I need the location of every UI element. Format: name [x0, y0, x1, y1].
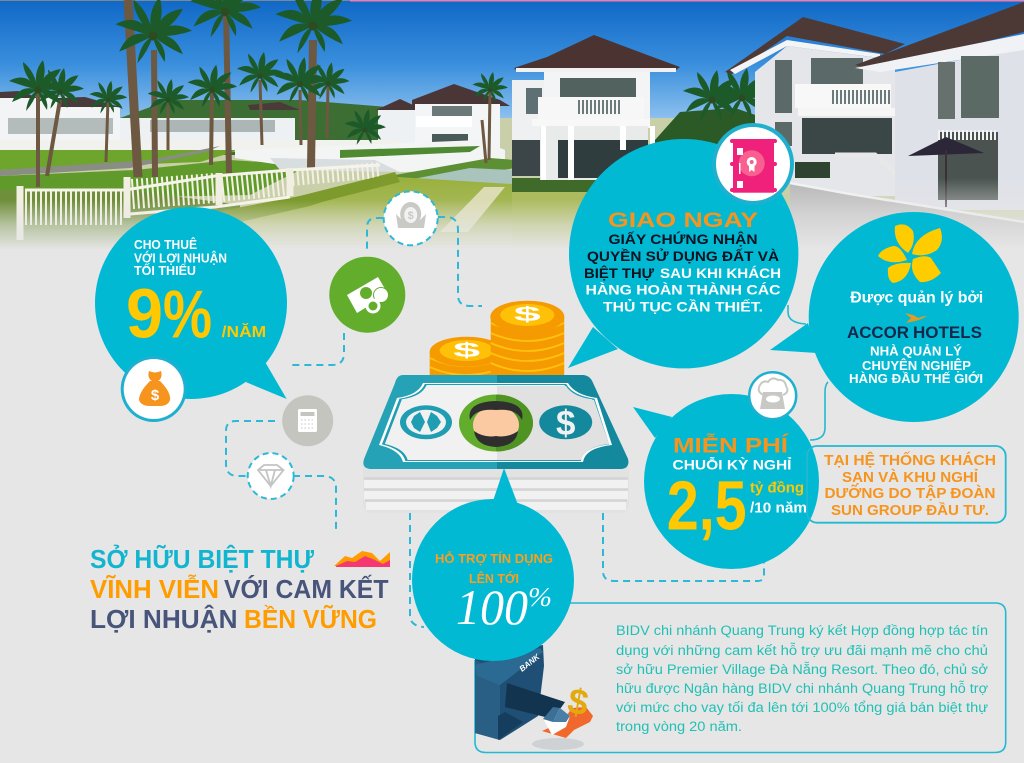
- callout: Sun Group hotels: SẠN VÀ KHU NGHỈ: [842, 469, 978, 486]
- icon: certificate notebook: [712, 123, 794, 205]
- bubble: free holiday chain: tỷ đồng: [750, 480, 804, 497]
- bubble: Accor Hotels management: HOTELS: [913, 323, 982, 342]
- bubble: rental yield 9%: 9: [126, 275, 163, 353]
- bubble: Accor Hotels management: HÀNG ĐẦU THẾ GIỚI: [849, 371, 983, 386]
- bubble: immediate handover: THỦ TỤC CẦN THIẾT.: [603, 298, 763, 315]
- callout: Sun Group hotels: SUN GROUP ĐẦU TƯ.: [831, 502, 989, 519]
- icon: diamond: [248, 453, 294, 499]
- title: VỚI CAM KẾT: [224, 574, 389, 604]
- text panel: BIDV credit: sở hữu Premier Village Đà Nẵng Resort. Theo đó, chủ sở: [616, 662, 988, 677]
- icon: savings badge: $: [408, 210, 414, 222]
- bubble: free holiday chain: /10 năm: [750, 500, 807, 517]
- title: VĨNH VIỄN: [90, 574, 219, 604]
- bubble: Accor Hotels management: CHUYÊN NGHIỆP: [862, 358, 971, 373]
- bubble: immediate handover: HÀNG HOÀN THÀNH CÁC: [586, 282, 780, 298]
- title: LỢI NHUẬN: [90, 604, 238, 634]
- icon: green money: [329, 257, 405, 333]
- bubble: immediate handover: BIỆT THỰ: [584, 264, 654, 281]
- icon: bank building: BANK: [518, 652, 542, 674]
- bubble: rental yield 9%: TỐI THIỂU: [134, 263, 196, 278]
- bubble: rental yield 9%: [95, 207, 287, 399]
- callout: Sun Group hotels: DƯỠNG DO TẬP ĐOÀN: [824, 484, 996, 502]
- bubble: credit support 100%: LÊN TỚI: [469, 571, 519, 586]
- text panel: BIDV credit: dụng với những cam kết hỗ trợ ưu đãi mạnh mẽ cho chủ: [616, 643, 988, 658]
- callout: Sun Group hotels: TẠI HỆ THỐNG KHÁCH: [824, 451, 996, 469]
- icon: calculator: [282, 395, 333, 446]
- bubble: free holiday chain: MIỄN PHÍ: [673, 435, 789, 458]
- coin stacks: $: [453, 340, 480, 362]
- text panel: BIDV credit: BIDV chi nhánh Quang Trung ký kết Hợp đồng hợp tác tín: [616, 623, 988, 638]
- white fence: [20, 165, 395, 240]
- bubble: immediate handover: GIẤY CHỨNG NHẬN: [608, 230, 758, 247]
- icon: accor bird: [905, 313, 927, 323]
- bubble: immediate handover: GIAO NGAY: [608, 209, 758, 232]
- bubble: Accor Hotels management: Được quản lý bởi: [850, 290, 983, 307]
- title: [90, 543, 389, 634]
- bubble: free holiday chain: 2,5: [667, 466, 747, 544]
- bubble: free holiday chain: [633, 394, 819, 569]
- bubble: credit support 100%: 100: [456, 579, 528, 635]
- bubble: credit support 100%: HỖ TRỢ TÍN DỤNG: [435, 551, 553, 566]
- bubble: rental yield 9%: /NĂM: [222, 322, 266, 341]
- icon: cloud phone: [749, 372, 796, 419]
- icon: bank building: [475, 645, 593, 750]
- icon: money bag: $: [151, 387, 160, 404]
- bubble: immediate handover: SAU KHI KHÁCH: [660, 265, 781, 281]
- icon: man portrait: [459, 394, 533, 452]
- bubble: free holiday chain: CHUỖI KỲ NGHỈ: [672, 455, 792, 472]
- villa right 2: [790, 2, 1024, 250]
- bubble: rental yield 9%: %: [163, 277, 212, 353]
- title: SỞ HỮU BIỆT THỰ: [90, 543, 314, 574]
- palm trees: [9, 0, 772, 187]
- coin stacks: $: [514, 304, 541, 326]
- bubble: immediate handover: QUYỀN SỬ DỤNG ĐẤT VÀ: [587, 247, 779, 264]
- bubble: immediate handover: [568, 139, 798, 368]
- villa right 1: [725, 17, 915, 196]
- icon: bank building: $: [565, 680, 592, 724]
- icon: yellow flower: [878, 224, 942, 283]
- villa centre: [512, 35, 680, 180]
- text panel: BIDV credit: hữu được Ngân hàng BIDV chi nhánh Quang Trung hỗ trợ: [616, 681, 988, 696]
- bubble: rental yield 9%: CHO THUÊ: [134, 237, 197, 252]
- title: BỀN VỮNG: [244, 604, 377, 634]
- callout: Sun Group hotels: [807, 446, 1006, 523]
- text panel: BIDV credit: [475, 603, 1006, 752]
- bubble: Accor Hotels management: ACCOR: [847, 323, 909, 342]
- solid connector lines: [788, 305, 828, 440]
- bubble: Accor Hotels management: [770, 212, 1019, 422]
- photo fade left: [0, 200, 790, 250]
- header resort photo: [0, 0, 1024, 250]
- text panel: BIDV credit: trong vòng 20 năm.: [616, 719, 742, 734]
- banknote stack: $: [556, 404, 575, 443]
- bubble: rental yield 9%: VỚI LỢI NHUẬN: [134, 250, 227, 265]
- dashed connector lines: [226, 217, 764, 627]
- icon: mini area chart: [334, 551, 390, 567]
- coin stacks: [430, 301, 564, 378]
- icon: money bag: [121, 356, 187, 422]
- banknote stack: [363, 375, 629, 513]
- bubble: credit support 100%: [412, 468, 574, 661]
- photo fade right: [790, 178, 1024, 250]
- text panel: BIDV credit: với mức cho vay tối đa lên tới 100% tổng giá bán biệt thự: [616, 700, 988, 715]
- icon: savings badge: [384, 191, 438, 245]
- bubble: credit support 100%: %: [528, 582, 552, 612]
- bubble: Accor Hotels management: NHÀ QUẢN LÝ: [870, 344, 963, 359]
